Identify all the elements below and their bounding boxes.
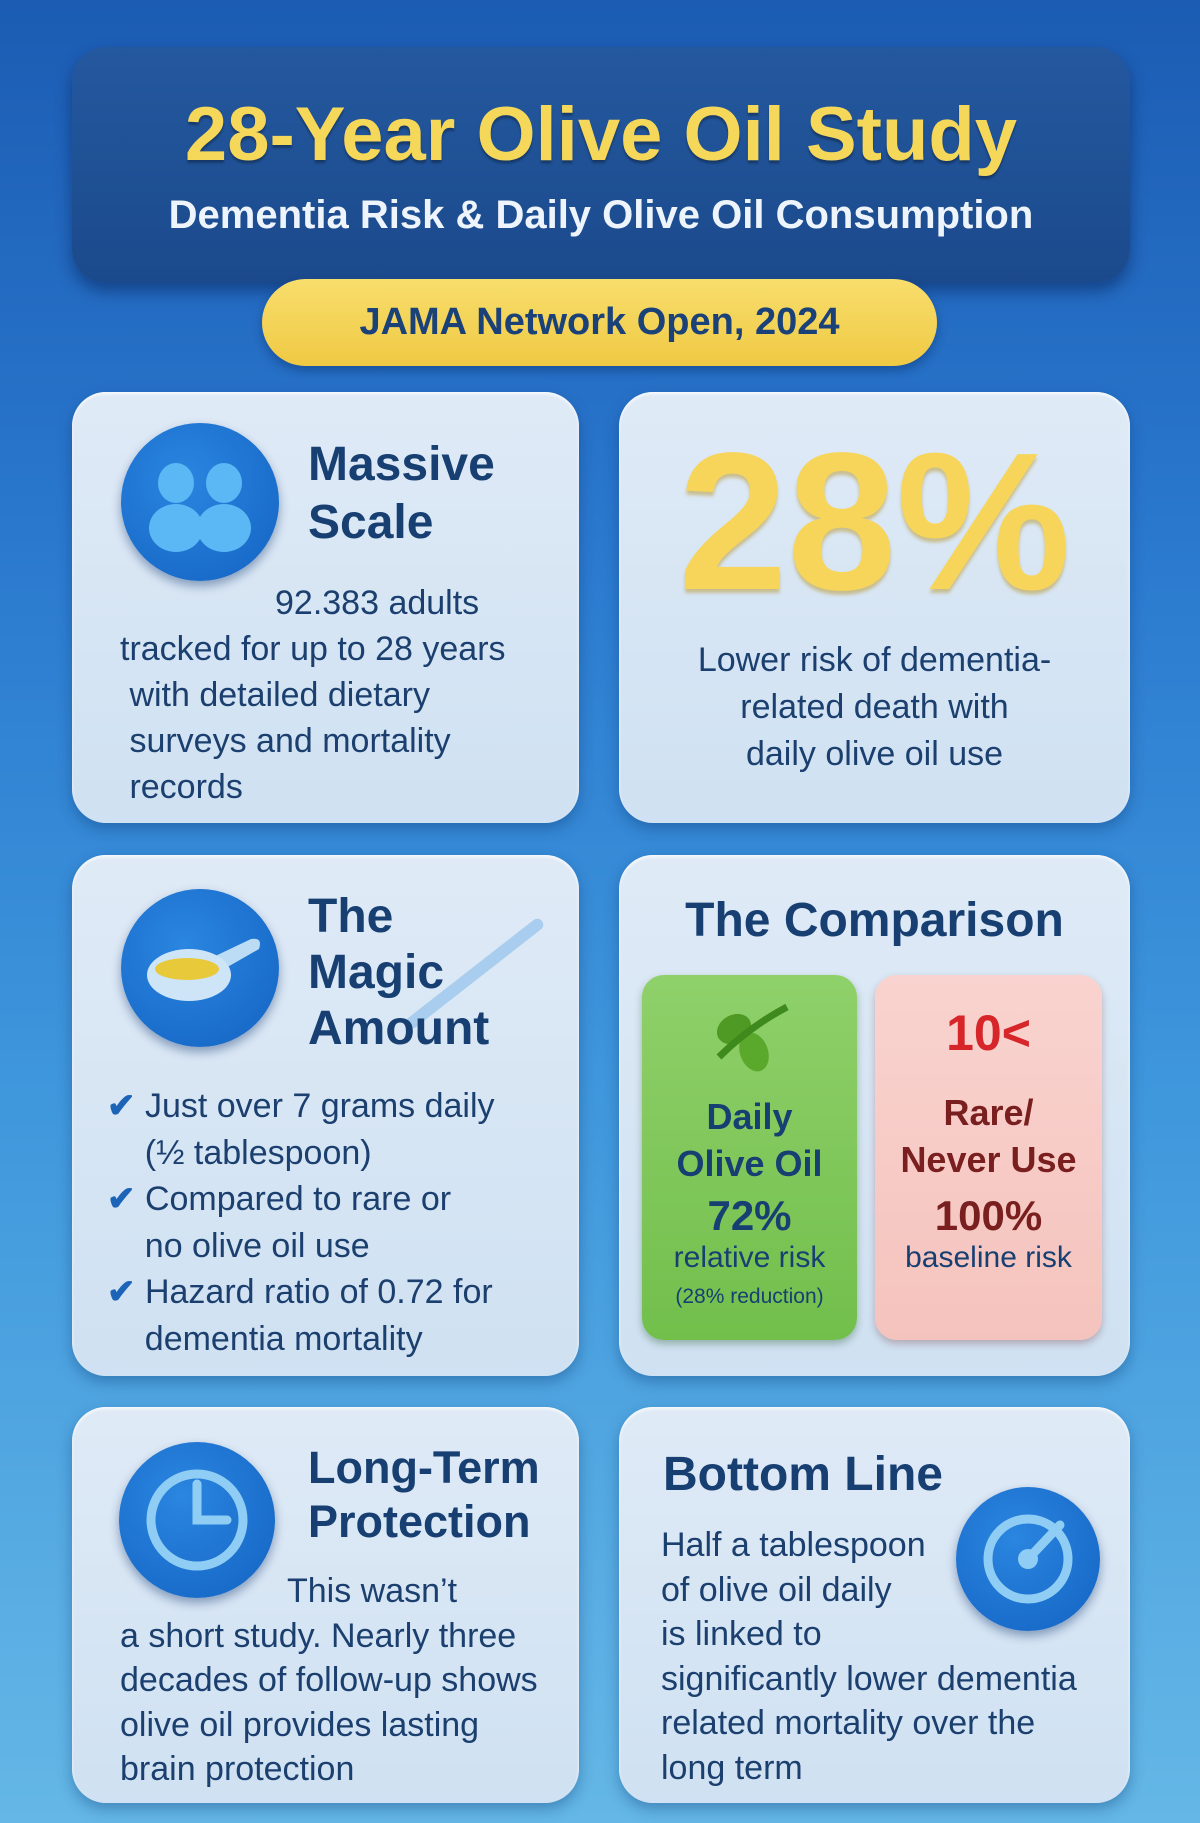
panel: comparison xyxy=(619,855,1130,1376)
body: brain protection xyxy=(120,1750,354,1788)
checklist: ✔ Compared to rare or xyxy=(107,1180,451,1218)
body: surveys and mortality xyxy=(129,722,451,760)
source pill: JAMA Network Open, 2024 xyxy=(359,301,840,343)
icon: spoon xyxy=(121,889,279,1047)
subtitle: Dementia Risk & Daily Olive Oil Consumption xyxy=(169,193,1033,237)
box: daily olive oil: 72% xyxy=(707,1192,792,1239)
box: daily olive oil: Olive Oil xyxy=(676,1143,823,1184)
checklist: ✔ Just over 7 grams daily xyxy=(107,1087,495,1125)
body: with detailed dietary xyxy=(129,676,430,714)
icon: people xyxy=(121,423,279,581)
box: rare/never xyxy=(875,975,1102,1340)
body: records xyxy=(129,768,243,806)
description xyxy=(698,641,1051,773)
box: daily olive oil: (28% reduction) xyxy=(675,1285,824,1308)
description: related death with xyxy=(740,688,1009,726)
box: rare/never: Never Use xyxy=(900,1139,1077,1180)
body: significantly lower dementia xyxy=(661,1660,1077,1698)
body: of olive oil daily xyxy=(661,1570,892,1608)
title panel xyxy=(72,47,1130,283)
box: daily olive oil xyxy=(642,975,857,1340)
icon: gauge xyxy=(956,1487,1100,1631)
box: rare/never: 10< xyxy=(946,1005,1031,1061)
box: daily olive oil: relative risk xyxy=(674,1241,825,1274)
body xyxy=(120,1572,538,1788)
body: related mortality over the xyxy=(661,1704,1035,1742)
heading: Long-Term xyxy=(308,1442,540,1493)
description: Lower risk of dementia- xyxy=(698,641,1051,679)
body: olive oil provides lasting xyxy=(120,1706,479,1744)
heading: Amount xyxy=(308,1002,489,1055)
heading: Magic xyxy=(308,946,444,999)
panel: long-term protection xyxy=(72,1407,579,1803)
heading: The Comparison xyxy=(685,894,1064,947)
body: decades of follow-up shows xyxy=(120,1661,538,1699)
title: 28-Year Olive Oil Study xyxy=(185,92,1017,177)
body: This wasn’t xyxy=(287,1572,457,1610)
checklist: no olive oil use xyxy=(145,1226,370,1264)
box: rare/never: baseline risk xyxy=(905,1241,1072,1274)
description: daily olive oil use xyxy=(746,735,1003,773)
heading: Massive xyxy=(308,438,495,491)
source pill xyxy=(262,279,937,366)
checklist: dementia mortality xyxy=(145,1320,423,1358)
heading xyxy=(308,438,495,549)
icon: olives xyxy=(716,1004,788,1072)
heading: Protection xyxy=(308,1496,531,1547)
body xyxy=(120,584,506,806)
heading xyxy=(308,1442,540,1547)
heading xyxy=(308,890,489,1055)
big stat: 28% xyxy=(678,412,1071,631)
panel: massive scale xyxy=(72,392,579,823)
heading: Scale xyxy=(308,496,433,549)
checklist: (½ tablespoon) xyxy=(145,1134,372,1172)
panel: bottom line xyxy=(619,1407,1130,1803)
box: daily olive oil: Daily xyxy=(706,1096,793,1137)
panel: 28 percent xyxy=(619,392,1130,823)
box: rare/never: 100% xyxy=(935,1192,1042,1239)
body: is linked to xyxy=(661,1615,822,1653)
checklist: ✔ Hazard ratio of 0.72 for xyxy=(107,1273,493,1311)
body: Half a tablespoon xyxy=(661,1526,926,1564)
body: 92.383 adults xyxy=(275,584,479,622)
checklist xyxy=(107,1087,495,1358)
box: rare/never: Rare/ xyxy=(943,1092,1034,1133)
body: tracked for up to 28 years xyxy=(120,630,506,668)
heading: Bottom Line xyxy=(663,1448,943,1501)
heading: The xyxy=(308,890,393,943)
body: long term xyxy=(661,1748,803,1786)
icon: clock xyxy=(119,1442,275,1598)
body xyxy=(661,1526,1077,1786)
panel: magic amount xyxy=(72,855,579,1376)
body: a short study. Nearly three xyxy=(120,1616,516,1654)
icon: spoon handle xyxy=(404,916,546,1030)
